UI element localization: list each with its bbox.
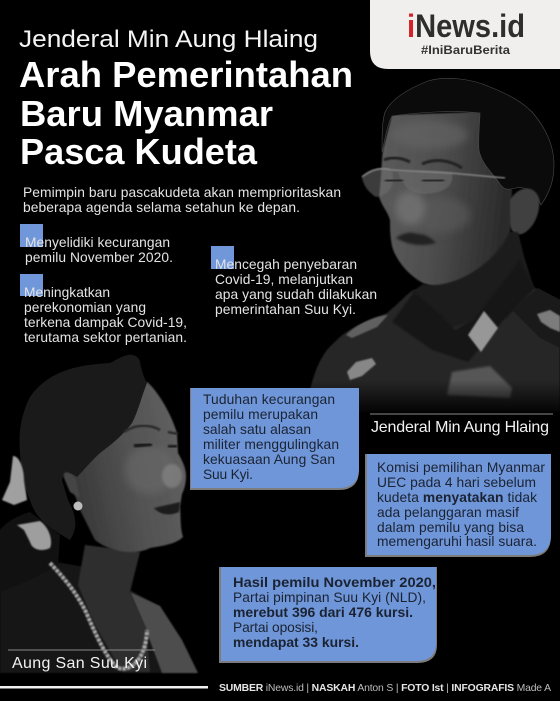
epaulette left badges — [346, 315, 388, 338]
callout: tuduhan kecurangan: kekuasaan Aung San — [203, 452, 335, 467]
agenda item 2: perekonomian yang — [24, 300, 146, 315]
glasses lenses — [362, 168, 452, 197]
earring — [74, 502, 82, 510]
agenda item 1 — [20, 224, 173, 265]
hair — [382, 78, 554, 205]
collar pin — [468, 311, 498, 352]
medal ribbons — [447, 366, 512, 398]
footer credits: SUMBER iNews.id | NASKAH Anton S | FOTO Ist | INFOGRAFIS Made A — [219, 683, 551, 694]
ear — [64, 472, 80, 498]
callout: hasil pemilu: Hasil pemilu November 2020, — [233, 575, 436, 590]
agenda item 3: apa yang sudah dilakukan — [215, 287, 377, 302]
callout: hasil pemilu — [219, 567, 437, 663]
callout: tuduhan kecurangan: militer menggulingkan — [203, 437, 339, 452]
agenda item 3: Covid-19, melanjutkan — [215, 272, 353, 287]
neck — [78, 545, 150, 672]
agenda item 1: pemilu November 2020. — [25, 250, 173, 265]
callout: komisi pemilihan — [365, 454, 551, 557]
cheek highlight — [125, 446, 175, 494]
ear — [510, 188, 539, 234]
bullet square — [20, 274, 43, 296]
caption: Jenderal Min Aung Hlaing: Jenderal Min Aung Hlaing — [371, 419, 549, 436]
agenda item 2: terutama sektor pertanian. — [24, 330, 187, 345]
headline: Baru Myanmar — [20, 93, 273, 134]
pearl necklace — [50, 563, 147, 669]
portrait: Jenderal Min Aung Hlaing — [300, 78, 560, 416]
headline: Pasca Kudeta — [20, 131, 258, 172]
agenda item 3: pemerintahan Suu Kyi. — [215, 302, 356, 317]
bullet square — [20, 224, 43, 247]
eyes and brows — [384, 158, 462, 168]
intro text: beberapa agenda selama setahun ke depan. — [23, 200, 300, 215]
callout: hasil pemilu: mendapat 33 kursi. — [233, 635, 359, 650]
portrait: Aung San Suu Kyi — [0, 355, 198, 673]
callout: komisi pemilihan: Komisi pemilihan Myanmar — [377, 460, 545, 475]
mouth shadow — [396, 233, 436, 245]
agenda item 2: terkena dampak Covid-19, — [24, 315, 187, 330]
callout: tuduhan kecurangan: Tuduhan kecurangan — [203, 392, 335, 407]
neck — [412, 232, 533, 328]
callout: tuduhan kecurangan: salah satu alasan — [203, 422, 311, 437]
lips — [154, 502, 180, 514]
epaulette right — [512, 288, 560, 348]
logo hashtag: #IniBaruBerita — [421, 45, 511, 57]
hair back knot — [0, 512, 60, 592]
agenda item 2: Meningkatkan — [24, 285, 110, 300]
callout: komisi pemilihan: ada pelanggaran masif — [377, 505, 519, 520]
uniform body — [310, 258, 560, 412]
fade bottom — [300, 380, 560, 416]
nose highlight — [395, 191, 425, 225]
forehead highlight — [392, 121, 468, 149]
hair — [19, 355, 147, 540]
callout: hasil pemilu: Partai pimpinan Suu Kyi (NLD), — [233, 590, 426, 605]
callout: hasil pemilu: merebut 396 dari 476 kursi. — [233, 605, 413, 620]
callout: komisi pemilihan: memengaruhi hasil suara. — [377, 534, 537, 549]
callout: komisi pemilihan: kudeta menyatakan tidak — [377, 490, 537, 505]
nose highlight — [162, 464, 182, 488]
dress — [0, 560, 197, 673]
callout: komisi pemilihan: dalam pemilu yang bisa — [377, 520, 524, 535]
title block — [19, 26, 353, 172]
headline — [19, 54, 353, 172]
collar — [392, 260, 535, 362]
bullet square — [211, 246, 234, 269]
agenda item 1: Menyelidiki kecurangan — [25, 235, 170, 250]
callout: komisi pemilihan: UEC pada 4 hari sebelum — [377, 475, 536, 490]
headline: Arah Pemerintahan — [19, 54, 353, 95]
cheek highlight — [410, 197, 470, 233]
face — [379, 112, 512, 288]
caption: Aung San Suu Kyi: Aung San Suu Kyi — [12, 655, 147, 672]
drape — [130, 592, 198, 673]
intro text — [23, 185, 341, 215]
callout: hasil pemilu: Partai oposisi, — [233, 620, 318, 635]
flowers — [2, 456, 27, 505]
callout: tuduhan kecurangan: Suu Kyi. — [203, 467, 253, 482]
agenda item 3 — [211, 246, 377, 317]
callout: tuduhan kecurangan: pemilu merupakan — [203, 407, 318, 422]
eye and brow shadows — [124, 426, 178, 434]
callout: tuduhan kecurangan — [190, 388, 359, 490]
intro text: Pemimpin baru pascakudeta akan memprioritaskan — [23, 185, 341, 200]
subtitle: Jenderal Min Aung Hlaing — [19, 26, 318, 53]
logo wordmark: iNews.id — [407, 8, 525, 44]
agenda item 2 — [20, 274, 187, 345]
logo panel: iNews.id — [370, 0, 560, 69]
face — [66, 382, 186, 552]
agenda item 3: Mencegah penyebaran — [215, 257, 357, 272]
